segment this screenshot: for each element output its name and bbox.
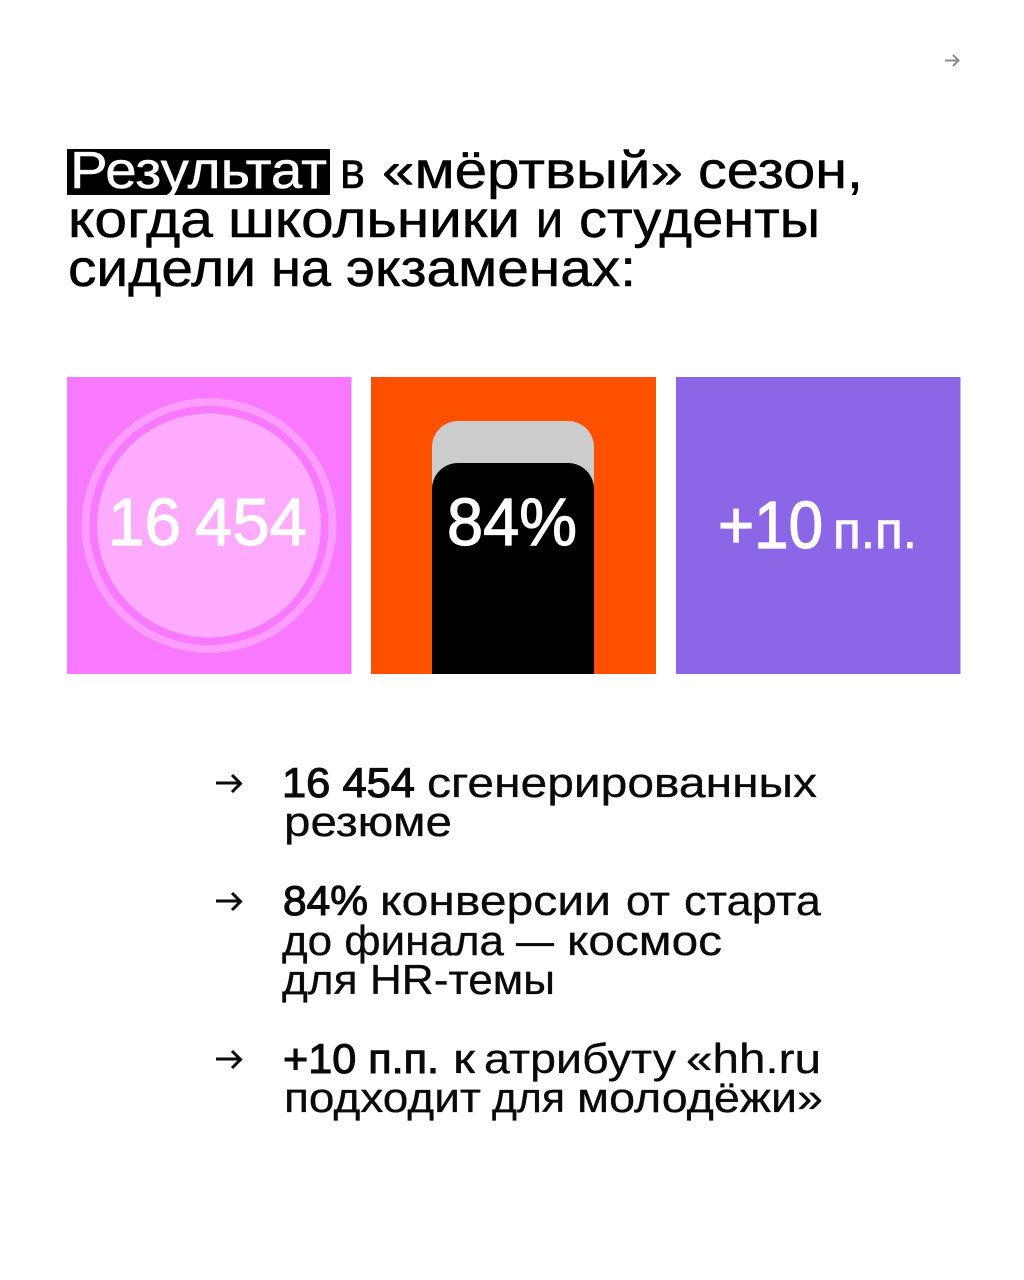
panel: +10 points	[676, 377, 960, 674]
item 3 text: для	[492, 1074, 565, 1121]
title highlight: Результат: Результат	[70, 142, 327, 200]
title line 1	[340, 142, 863, 200]
panel: 84% conversion	[371, 377, 656, 674]
icon: arrow	[216, 1051, 240, 1068]
item 3 text: атрибуту	[484, 1035, 676, 1082]
title line 3: экзаменах:	[346, 240, 636, 298]
title line 3	[68, 240, 636, 298]
item 3 text: к	[453, 1035, 476, 1082]
item 2 text	[282, 877, 822, 1003]
stat unit: п.п.: п.п.	[833, 502, 917, 560]
title line 1: в	[340, 142, 365, 200]
stat: 84%: 84%	[447, 485, 577, 560]
item 1 text: резюме	[284, 798, 452, 845]
item 3 text: молодёжи»	[577, 1074, 823, 1121]
grey bar	[432, 421, 594, 674]
item 2 text: конверсии	[380, 877, 611, 924]
list item 1	[216, 759, 817, 845]
item 3 text	[283, 1035, 823, 1121]
item 2 text: космос	[567, 917, 722, 964]
title line 2: когда	[68, 191, 213, 249]
title line 1: сезон,	[698, 142, 863, 200]
panel: 16 454 resumes	[67, 377, 352, 674]
item 2 text: до финала	[282, 917, 505, 964]
item 1 text	[282, 759, 817, 845]
item 3 text: «hh.ru	[686, 1035, 821, 1082]
item 3 text: подходит	[284, 1074, 481, 1121]
stat: 16 454	[108, 485, 307, 560]
icon: top right arrow	[945, 55, 958, 66]
stat: 16 454: 16	[108, 485, 181, 560]
item 1 text: сгенерированных	[427, 759, 817, 806]
title line 3: сидели	[68, 240, 256, 298]
item 3 text: +10 п.п.	[283, 1035, 439, 1082]
stat: +10: +10	[718, 488, 823, 563]
item 2 text: —	[516, 917, 554, 964]
title line 2	[68, 191, 820, 249]
title	[67, 142, 863, 298]
title line 2: студенты	[579, 191, 820, 249]
item 2 text: старта	[684, 877, 822, 924]
list item 3	[216, 1035, 823, 1121]
item 2 text: 84%	[283, 877, 368, 924]
stat: 16 454: 454	[195, 485, 307, 560]
title line 2: и	[536, 191, 563, 249]
title line 2: школьники	[228, 191, 520, 249]
icon: arrow	[216, 893, 240, 910]
black bar	[432, 463, 594, 674]
icon: arrow	[216, 775, 240, 792]
title line 3: на	[271, 240, 331, 298]
item 2 text: от	[626, 877, 670, 924]
item 2 text: для HR-темы	[282, 956, 555, 1003]
title line 1: «мёртвый»	[382, 142, 683, 200]
list item 2	[216, 877, 822, 1003]
circle graphic	[86, 402, 332, 649]
item 1 text: 16 454	[282, 759, 415, 806]
